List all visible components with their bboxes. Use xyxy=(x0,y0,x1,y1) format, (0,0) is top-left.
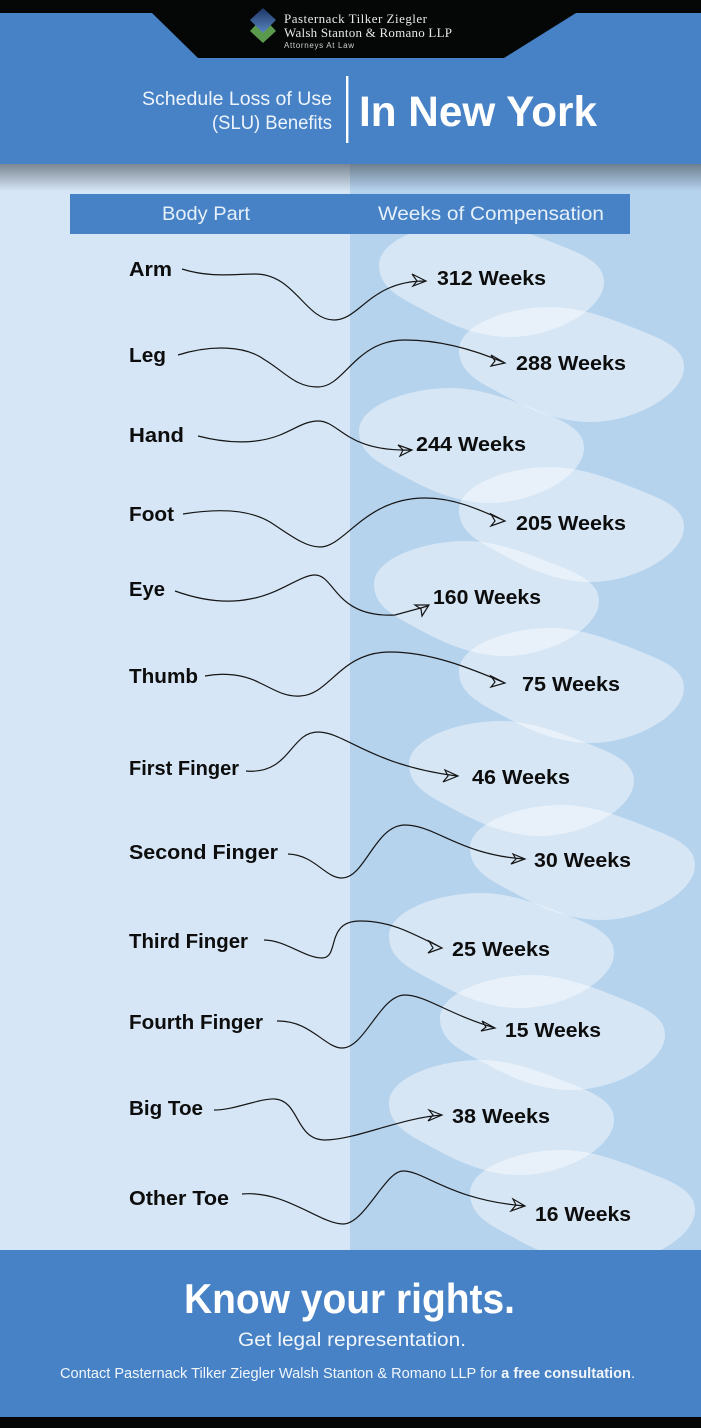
row: first finger: First Finger xyxy=(129,758,239,780)
header subtitle line 2: (SLU) Benefits xyxy=(212,112,332,134)
column heading: body part: Body Part xyxy=(162,203,251,225)
background blobs xyxy=(359,222,695,1265)
footer headline: Know your rights. xyxy=(184,1275,515,1322)
footer subheading: Get legal representation. xyxy=(238,1329,466,1351)
row: leg xyxy=(129,340,626,387)
row: leg: 288 Weeks xyxy=(516,353,626,375)
logo tagline: Attorneys At Law xyxy=(284,41,354,50)
table header bar xyxy=(70,194,630,234)
row: foot xyxy=(129,498,626,547)
logo xyxy=(250,8,452,50)
row: leg: Leg xyxy=(129,345,166,367)
row: first finger xyxy=(129,732,570,789)
row: arm: Arm xyxy=(129,259,172,281)
logo firm name line 2: Walsh Stanton & Romano LLP xyxy=(284,25,452,40)
row: big toe: Big Toe xyxy=(129,1098,203,1120)
row: second finger: Second Finger xyxy=(129,842,278,864)
row: first finger: 46 Weeks xyxy=(472,767,570,789)
header divider xyxy=(346,76,348,143)
top black logo plate xyxy=(0,0,701,58)
background: left column xyxy=(0,160,350,1255)
row: other toe: 16 Weeks xyxy=(535,1204,631,1226)
icon: blue diamond xyxy=(250,8,276,33)
header title: In New York xyxy=(359,88,597,136)
logo firm name line 1: Pasternack Tilker Ziegler xyxy=(284,11,428,26)
row: fourth finger: Fourth Finger xyxy=(129,1012,263,1034)
icon: green chevron xyxy=(250,17,276,43)
row: eye xyxy=(129,575,541,616)
row: eye: 160 Weeks xyxy=(433,587,541,609)
header band xyxy=(0,0,701,164)
row: thumb: 75 Weeks xyxy=(522,674,620,696)
header shadow xyxy=(0,163,701,191)
row: eye: Eye xyxy=(129,579,165,601)
footer band xyxy=(0,1250,701,1417)
row: big toe xyxy=(129,1098,550,1140)
row: foot: Foot xyxy=(129,504,174,526)
row: arm: 312 Weeks xyxy=(437,268,546,290)
row: second finger xyxy=(129,825,631,878)
row: arm xyxy=(129,259,546,320)
row: second finger: 30 Weeks xyxy=(534,850,631,872)
row: other toe: Other Toe xyxy=(129,1188,229,1210)
background: right column xyxy=(350,160,701,1255)
footer contact line: Contact Pasternack Tilker Ziegler Walsh Stanton & Romano LLP for a free consultation. xyxy=(60,1366,635,1382)
row: foot: 205 Weeks xyxy=(516,513,626,535)
row: other toe xyxy=(129,1171,631,1226)
footer bottom black strip xyxy=(0,1417,701,1428)
row: fourth finger xyxy=(129,995,601,1048)
header subtitle: Schedule Loss of Use xyxy=(142,88,332,110)
row: third finger xyxy=(129,921,550,961)
row: third finger: 25 Weeks xyxy=(452,939,550,961)
row: thumb xyxy=(129,652,620,696)
row: thumb: Thumb xyxy=(129,666,198,688)
row: third finger: Third Finger xyxy=(129,931,248,953)
row: hand: 244 Weeks xyxy=(416,434,526,456)
row: big toe: 38 Weeks xyxy=(452,1106,550,1128)
column heading: weeks: Weeks of Compensation xyxy=(378,203,604,225)
row: hand: Hand xyxy=(129,425,184,447)
row: fourth finger: 15 Weeks xyxy=(505,1020,601,1042)
row: hand xyxy=(129,421,526,456)
